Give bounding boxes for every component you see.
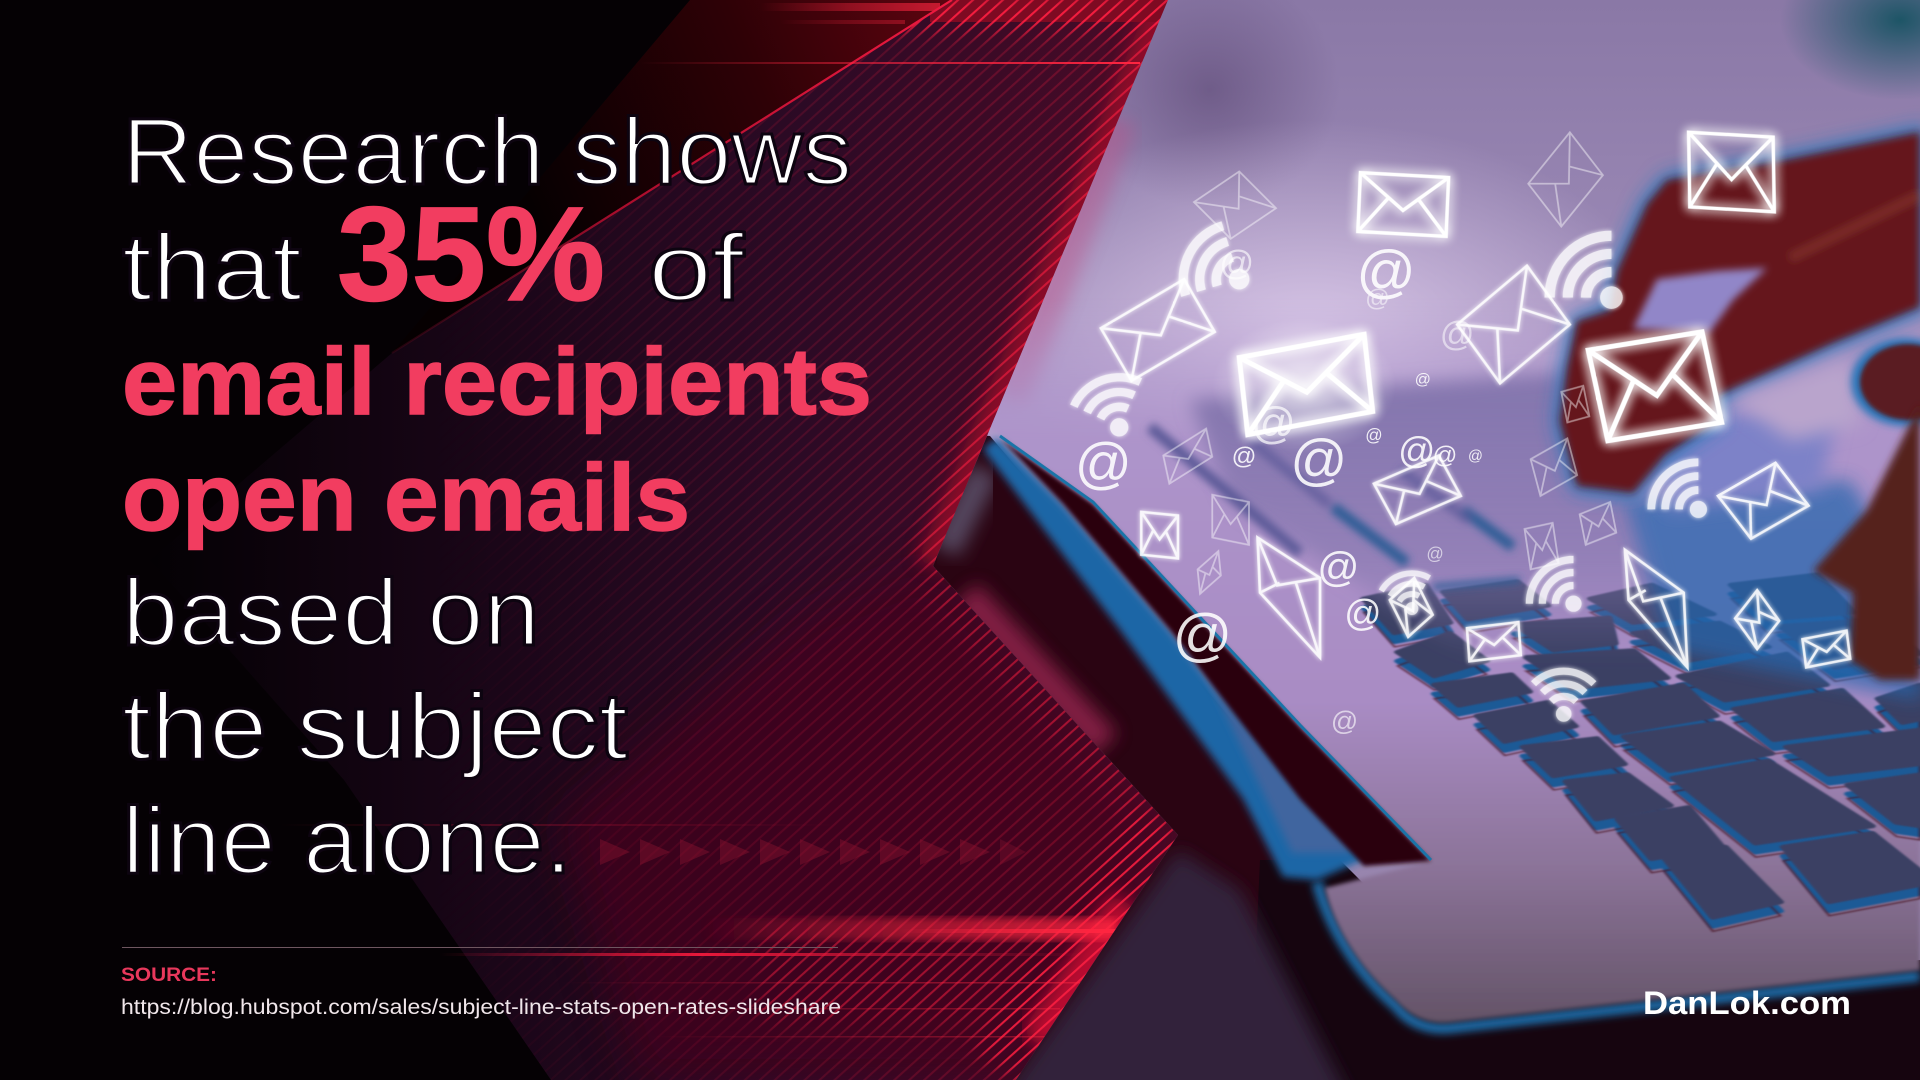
at signs: @	[1398, 430, 1435, 471]
email icons and symbols	[1069, 132, 1850, 736]
grey tip near chevron point	[945, 470, 985, 550]
at signs: @	[1415, 371, 1431, 388]
dark red top wedge	[392, 0, 952, 353]
right hand bottom	[1813, 404, 1920, 680]
periwinkle glow at right	[1650, 400, 1840, 510]
word: that: that	[122, 215, 302, 321]
at signs: @	[1426, 544, 1444, 564]
faint envelopes	[1163, 132, 1616, 594]
teal corner	[1789, 0, 1920, 94]
divider rule	[122, 947, 838, 948]
bottom left purple shade	[1000, 850, 1350, 1080]
wedge red bands	[760, 3, 940, 24]
photo: laptop with floating email icons	[900, 0, 1920, 1080]
source label: SOURCE:	[121, 965, 217, 986]
hand	[1560, 132, 1920, 493]
wedge edge line	[392, 0, 952, 353]
key side walls	[1364, 583, 1920, 927]
slot blue edge	[1000, 436, 1431, 860]
upper key gaps	[1150, 427, 1520, 587]
finger lobe	[1860, 344, 1920, 420]
at signs: @	[1317, 544, 1360, 591]
key shadow lines	[1364, 588, 1920, 931]
line: based on: based on	[122, 560, 540, 666]
dark red lower tint	[560, 566, 1178, 1080]
at signs: @	[1290, 428, 1347, 491]
at signs: @	[1219, 244, 1254, 282]
at signs: @	[1468, 448, 1483, 464]
source url: https://blog.hubspot.com/sales/subject-line-stats-open-rates-slideshare	[121, 996, 841, 1019]
at signs: @	[1365, 285, 1390, 312]
central white glow	[1212, 318, 1396, 453]
magenta band along chevron	[965, 595, 1105, 745]
pink edge light	[1010, 120, 1120, 400]
dark purple panel body	[290, 15, 1178, 1080]
horizontal streaks	[280, 824, 1090, 1038]
kite envelope left	[1258, 538, 1320, 658]
hand halo	[1560, 132, 1920, 493]
arrows row	[600, 839, 1026, 865]
diagonal stripes	[530, 0, 1175, 1080]
finger lobe halo	[1851, 338, 1920, 426]
big number: 35%: 35%	[337, 180, 605, 329]
at signs: @	[1365, 425, 1383, 445]
blue rim under deck	[1317, 882, 1920, 1028]
lower red glow along photo edge	[1040, 905, 1130, 1045]
red glow along upper photo edge	[933, 0, 1168, 566]
top bright band base	[930, 0, 1170, 22]
blue keyboard zone at right	[1625, 480, 1920, 700]
deck surface	[980, 300, 1920, 1022]
bright envelopes	[1239, 132, 1774, 441]
at signs: @	[1173, 603, 1232, 668]
photo base	[900, 0, 1920, 1080]
line: line alone.: line alone.	[122, 788, 572, 894]
blue hinge band	[983, 438, 1368, 880]
line: open emails: open emails	[122, 445, 690, 551]
keys	[1364, 574, 1920, 931]
bright streak	[900, 929, 1116, 933]
gap between fingers	[1633, 268, 1767, 332]
line: the subject: the subject	[122, 674, 628, 780]
fingers	[1560, 132, 1920, 493]
line: that 35% of	[122, 180, 745, 329]
logo wordmark: DanLok.com	[1643, 985, 1851, 1021]
at signs: @	[1432, 442, 1457, 469]
line: Research shows: Research shows	[122, 99, 852, 205]
upper keyboard haze	[1190, 370, 1680, 660]
key tops	[1364, 574, 1920, 918]
medium envelopes	[1101, 266, 1850, 667]
region left of the hinge	[933, 436, 1281, 1080]
at signs: @	[1331, 706, 1358, 736]
light streak on finger	[1790, 195, 1920, 258]
top red line	[640, 62, 1140, 64]
bottom dark region	[1250, 860, 1920, 1080]
lilac patch under finger	[1733, 360, 1860, 440]
wifi symbols	[1069, 218, 1728, 722]
source block	[121, 947, 841, 1019]
at signs: @	[1440, 315, 1475, 353]
title	[122, 99, 872, 894]
kite envelope right	[1625, 550, 1687, 667]
dark slot	[1000, 438, 1431, 866]
hinge lilac face	[1211, 682, 1351, 856]
at signs: @	[1344, 593, 1382, 634]
central light	[1023, 145, 1599, 402]
word: of: of	[648, 215, 745, 321]
at signs: @	[1075, 431, 1132, 494]
line: email recipients: email recipients	[122, 329, 872, 435]
glow streak	[700, 918, 1116, 940]
at signs: @	[1356, 239, 1416, 304]
dark top-left light falloff	[1120, 1, 1310, 180]
panel: red striped chevron	[290, 0, 1178, 1080]
at signs	[1075, 239, 1483, 736]
at signs: @	[1251, 399, 1296, 448]
at signs: @	[1232, 443, 1257, 470]
